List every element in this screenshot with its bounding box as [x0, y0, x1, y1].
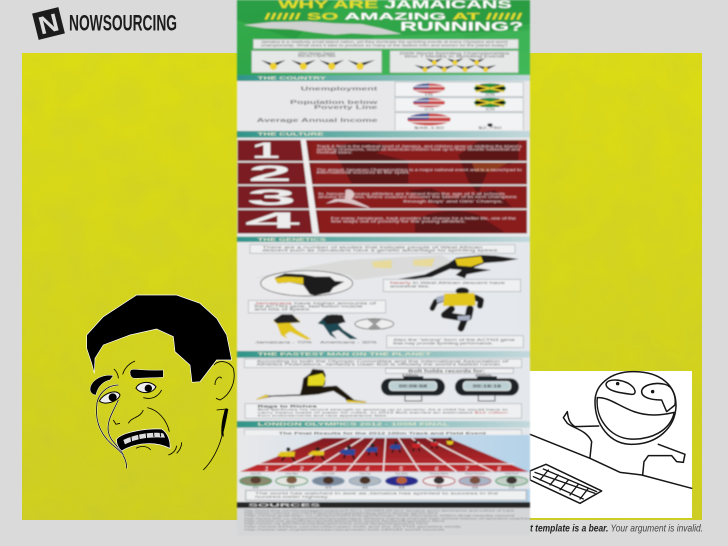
row: income — [395, 113, 523, 131]
row: unemployment — [395, 82, 523, 97]
rags to riches box: carry heavy loads of water for miles. In 2012 Bolt earned an estimated $12 million — [258, 410, 508, 414]
finalist portraits: 09.79 — [325, 487, 332, 489]
row labels: Unemployment — [301, 87, 378, 93]
intro text box: Jamaica is a relatively small island nation, yet they dominate the sprinting events at every Olympics and world — [261, 40, 508, 44]
silhouettes — [333, 142, 408, 183]
stopwatch: 200m: 00:19:19 — [473, 384, 502, 389]
row labels — [257, 87, 378, 124]
lane text: sprinting champions, much as American children look up to their favorite basketball and — [317, 147, 520, 151]
results subtitle box — [244, 430, 522, 436]
genetics intro box: descent such as Jamaicans have a genetic advantage for sprinting speed. — [262, 249, 499, 253]
lane numbers: 4 — [245, 208, 303, 233]
white meme panel — [525, 371, 692, 518]
finalist portraits — [237, 472, 530, 489]
track: 4 — [364, 466, 369, 473]
closing text box: The world has watched in awe as Jamaica has sprinted to success in the — [255, 492, 499, 496]
track: 7 — [465, 466, 469, 473]
sources: http://www.cia.gov/library/publications/the-world-factbook/geos/us.html — [244, 523, 429, 526]
finalist portraits: Justin Gatlin — [322, 473, 335, 476]
sources: http://www.nytimes.com/2012/sports/olympics/jamaica-sprint-factory-genes.html — [244, 512, 439, 515]
rags to riches box: from endorsements and race appearance fees. — [258, 413, 388, 417]
lane text: around the island, where coaches discover the talents of its next champions — [318, 195, 517, 199]
note: West African descent — [383, 279, 521, 292]
sources: http://www.iaaf.org/athletes/jamaica/usain-bolt-184182 world records — [244, 528, 446, 531]
lane text: through Boys' and Girls' Champs. — [403, 200, 504, 204]
title: RUNNING? — [400, 20, 523, 34]
white runner silhouette — [326, 189, 370, 208]
row: poverty: 16.5% — [485, 107, 495, 111]
sources: http://www.guardian.co.uk/sport/2012/aug/05/usain-bolt-olympics-100m-final-results-record — [244, 515, 516, 518]
note: Americans comparison: and lots of speed. — [254, 308, 311, 312]
heading: the culture — [237, 131, 530, 138]
running athlete — [432, 287, 481, 328]
records label: 100m — [402, 372, 419, 377]
lane text — [317, 145, 522, 223]
rags to riches box — [245, 404, 522, 418]
row: unemployment: 14.0% — [485, 93, 495, 97]
rags to riches box: Rags to Riches — [258, 404, 317, 408]
section: race track results — [237, 435, 533, 535]
row: poverty: 15.1% — [424, 107, 434, 111]
intro text box: championship. What does it take to produce so many of the fastest men and women on the planet today? — [261, 43, 508, 47]
finalist portraits: Yohan Blake — [285, 474, 299, 476]
heading: fastest man: THE FASTEST MAN ON THE PLANET — [258, 352, 431, 357]
section: the culture — [237, 130, 530, 240]
lane text: In Jamaica, young athletes are trained from the age of 5 at schools — [318, 192, 506, 196]
logo: NowSourcing — [32, 7, 177, 41]
lane text: few ways out of poverty for the young athletes. — [331, 219, 466, 223]
finalist portraits: Ryan Bailey — [395, 474, 409, 476]
genetics intro box — [250, 245, 515, 253]
lane numbers: 1 — [251, 138, 280, 163]
hair — [87, 295, 232, 382]
rags to riches box: Bolt attributes his record strength to growing up in poverty. As a child he would have to — [258, 407, 508, 411]
heading: London Olympics — [237, 421, 530, 428]
heading: London Olympics: LONDON OLYMPICS 2012 - 100M FINAL — [258, 422, 450, 427]
heading: fastest man — [237, 351, 530, 358]
stopwatch: 200m — [455, 376, 519, 401]
closing text box: hundred-meter highway. — [255, 495, 329, 499]
note: sprinter gene: that may provide sprinting performance. — [393, 341, 494, 345]
records label: 200m — [475, 372, 492, 377]
section: the genetics — [237, 237, 530, 352]
title — [264, 0, 523, 34]
row labels: Population below — [290, 100, 378, 106]
finalist portraits: Richard Thompson — [465, 473, 485, 476]
logo: NowSourcing: NOWSOURCING — [69, 10, 177, 36]
finalist portraits: Usain Bolt — [250, 473, 261, 476]
meme: typing stick figure — [530, 372, 692, 503]
caption: t template is a bear. Your argument is invalid. — [530, 522, 703, 534]
header section — [237, 0, 530, 75]
card: 2004 Olympic medals: 2004 Olympic Games — [298, 51, 335, 55]
track: 1 — [265, 466, 269, 473]
sources: SOURCES — [248, 503, 322, 509]
lane lines — [238, 161, 527, 163]
sources: http://www.cia.gov/library/publications/the-world-factbook/geos/jm.html — [244, 520, 445, 523]
runners — [277, 437, 454, 461]
finalist portraits: 09.98 — [472, 487, 479, 489]
track — [240, 438, 528, 473]
figures: muscle fibre percentages — [255, 314, 394, 344]
face lines — [96, 361, 234, 470]
heading: the genetics — [237, 237, 530, 242]
heading: the country — [237, 75, 530, 81]
note: sprinter gene: Also the "strong" form of the ACTN3 gene — [393, 338, 515, 342]
closing text box — [246, 490, 526, 500]
Bolt intro box — [244, 359, 522, 368]
row: poverty — [395, 98, 523, 112]
row labels: Average Annual Income — [257, 118, 378, 124]
sprinter — [398, 255, 518, 280]
note: West African descent: ancestral ties. — [390, 285, 430, 289]
note: Americans comparison — [248, 300, 386, 313]
eyebrows — [130, 369, 163, 378]
sources: http://www.bbc.co.uk/sport/0/olympics/jamaica-athletics-training-champs-high-school-history-of-sprinters-coaches — [244, 517, 533, 520]
title: ////// SO AMAZING AT ////// — [264, 11, 523, 21]
track: 5 — [399, 466, 403, 473]
results subtitle box: The Final Results for the 2012 100m Track and Field Event — [279, 431, 488, 435]
lane text: international success in the sport. — [317, 171, 410, 175]
Bolt intro box: According to both the Olympic Committee and the International Association of — [257, 359, 509, 363]
card: 2008 world medals — [390, 51, 518, 73]
Bolt runner — [256, 369, 367, 403]
records label: Bolt holds records for: — [408, 369, 486, 374]
finalist portraits: 09.88 — [399, 487, 405, 489]
yellow slide panel — [22, 53, 702, 520]
sources — [237, 502, 533, 535]
row: income: $48,130 — [414, 126, 444, 130]
lane text: The annual Jamaican Championships is a major national event and is a launchpad to — [317, 168, 522, 172]
infographic — [237, 0, 533, 535]
heading: the country: THE COUNTRY — [258, 75, 326, 80]
eyes — [136, 382, 156, 393]
figures: muscle fibre percentages: Americans - 30% — [320, 340, 377, 344]
row: unemployment: 8.4% — [425, 93, 433, 97]
card: 2004 Olympic medals — [252, 51, 382, 73]
note: West African descent: Nearly in West African descent have — [390, 281, 506, 285]
card: 2004 Olympic medals: Won ALL 4 Sprint Titles — [298, 54, 335, 58]
finalist portraits: 09.94 — [436, 487, 443, 489]
sources: http://www.time.com/time/magazine/article/0,9171,1834664,00.html Jamaica sprint dominance and culture of track — [244, 509, 516, 512]
lane numbers: 3 — [247, 185, 297, 210]
stopwatch: 100m — [381, 376, 445, 401]
row labels: Poverty Line — [314, 105, 377, 111]
lane text: football stars. — [317, 150, 353, 154]
card: 2008 world medals: 2009 World Sprinting Championships — [399, 51, 510, 55]
finalist portraits: Churandy Martina — [430, 473, 449, 476]
sprinter sequence ghosts — [252, 255, 455, 280]
finalist portraits: 09.75 — [289, 487, 295, 489]
sources: http://www.forbes.com/profile/usain-bolt/ and the ACTN3 genetics study — [244, 526, 463, 529]
note: Americans comparison: the ACTN3 gene, fast-twitch muscle — [254, 305, 363, 309]
red track — [238, 138, 527, 233]
finalist portraits: 11.99 — [509, 487, 515, 489]
card: 2008 world medals: Won 7 Medals in Sprinting Events — [404, 54, 505, 58]
lane numbers: 2 — [248, 161, 292, 186]
track: 3 — [332, 466, 336, 473]
finalist portraits: 09.80 — [362, 487, 369, 489]
map of Africa — [261, 271, 353, 296]
section: the country comparison — [237, 81, 530, 131]
logo: NowSourcing: N — [36, 8, 62, 40]
track: 6 — [435, 466, 439, 473]
heading: the culture: THE CULTURE — [258, 132, 324, 137]
finalist portraits: Tyson Gay — [359, 474, 371, 476]
figures: muscle fibre percentages: Jamaicans - 70% — [255, 340, 312, 344]
note: sprinter gene — [387, 336, 523, 348]
Bolt intro box: Athletics Federations, Jamaica's Usain Bolt is officially the world's fastest runner. — [257, 363, 502, 367]
note: Americans comparison: Jamaicans have higher amounts of — [254, 302, 376, 306]
lane text: For many Jamaicans, track provides the chance for a better life, one of the — [331, 216, 516, 220]
row: income: $2,750 — [478, 126, 502, 130]
lane numbers — [245, 138, 303, 233]
section: the fastest man on the planet — [237, 348, 530, 440]
intro text box — [253, 39, 518, 49]
stopwatch: 100m: 00:09:58 — [399, 384, 428, 389]
records label — [386, 368, 513, 377]
finalist portraits: Asafa Powell — [505, 473, 519, 476]
lane text: Track & field is the national sport of Jamaica, and children grow up idolizing the island's — [317, 145, 522, 149]
track: 2 — [299, 466, 304, 473]
finalist portraits: 09.63 — [253, 487, 259, 489]
track: 8 — [497, 466, 501, 473]
genetics intro box: There are a number of studies that indicate people of West African — [262, 245, 483, 249]
meme: worried face — [87, 295, 234, 470]
heading: the genetics: THE GENETICS — [258, 237, 326, 242]
Jamaica map — [243, 21, 402, 35]
